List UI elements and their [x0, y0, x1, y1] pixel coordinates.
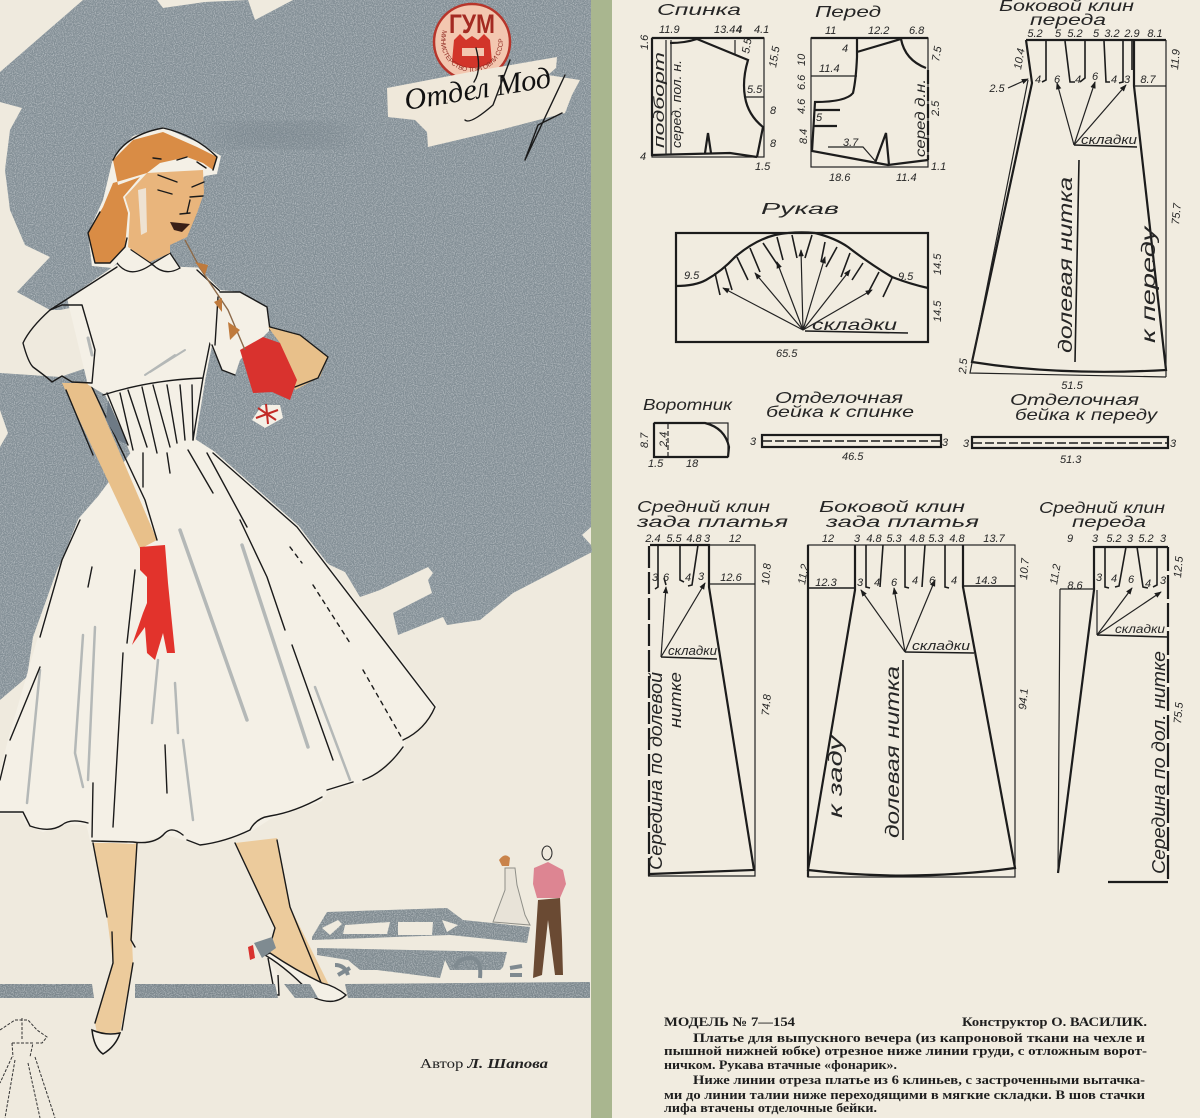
- description paragraphs: лифа втачены отделочные бейки.: [664, 1100, 877, 1115]
- pattern: front (Перед): 6.8: [909, 25, 925, 37]
- collar: [117, 247, 180, 272]
- pattern: back (Спинка): 5.5: [740, 37, 755, 55]
- pattern: back facing strip: 3: [750, 436, 757, 448]
- pattern: side gore of front (Боковой клин переда): 5.2: [1067, 28, 1083, 40]
- pattern: back (Спинка): 13.4: [714, 24, 735, 36]
- pattern: side gore of front (Боковой клин переда): к переду: [1139, 225, 1160, 343]
- heading: бейка к переду: [1015, 407, 1158, 424]
- pattern: front facing strip: [963, 392, 1177, 466]
- pattern: sleeve (Рукав): 14.5: [932, 300, 944, 322]
- pattern: centre gore of back: складки: [668, 644, 717, 658]
- designer credit: Конструктор О. ВАСИЛИК.: [962, 1014, 1147, 1029]
- heading: Средний клин: [637, 499, 770, 516]
- heading: зада платья: [824, 514, 980, 531]
- pattern: centre gore of front: 4: [1145, 578, 1151, 590]
- pattern: side gore of front (Боковой клин переда): 8.1: [1147, 28, 1163, 40]
- pattern: side gore of back: 6: [891, 577, 898, 589]
- pattern: front (Перед): 4: [842, 43, 848, 55]
- logo: GUM round badge: МИНИСТЕРСТВО ТОРГОВЛИ СССР: [441, 30, 503, 72]
- pattern: side gore of back: 4: [951, 575, 957, 587]
- pattern: side gore of front (Боковой клин переда): 4: [1111, 74, 1117, 86]
- pattern: side gore of front (Боковой клин переда): 8.7: [1140, 74, 1157, 86]
- pattern: centre gore of front: 9: [1067, 533, 1073, 545]
- pattern: back (Спинка): 4.1: [754, 24, 769, 36]
- pattern: side gore of front (Боковой клин переда): 4: [1075, 74, 1081, 86]
- heading: [766, 390, 914, 421]
- heading: Боковой клин: [819, 499, 965, 516]
- torn paper label with title: [387, 48, 580, 160]
- pattern: side gore of front (Боковой клин переда): 75.7: [1170, 202, 1184, 225]
- model description text: [664, 1014, 1147, 1115]
- pattern: side gore of back: 14.3: [975, 575, 998, 587]
- road band: [0, 982, 590, 998]
- logo: GUM round badge: [432, 2, 512, 76]
- pattern: front (Перед): 8.4: [798, 129, 810, 144]
- pattern: side gore of front (Боковой клин переда): 2.5: [988, 83, 1006, 95]
- pattern: side gore of front (Боковой клин переда): 51.5: [1061, 380, 1084, 392]
- pattern: side gore of back: [796, 499, 1032, 877]
- pattern: centre gore of front: 6: [1128, 574, 1135, 586]
- pattern: back (Спинка): 15.5: [767, 44, 783, 69]
- pattern: collar (Воротник): 18: [686, 458, 699, 470]
- pattern: back (Спинка): 5.5: [747, 84, 763, 96]
- description paragraphs: Платье для выпускного вечера (из капроновой ткани на чехле и: [693, 1030, 1146, 1045]
- author credit: Автор Л. Шапова: [420, 1057, 548, 1072]
- pattern: sleeve (Рукав): 14.5: [932, 253, 944, 275]
- pattern: side gore of front (Боковой клин переда): 3: [1124, 74, 1131, 86]
- red glove on left hand: [132, 545, 175, 660]
- pattern: side gore of back: 11.2: [796, 563, 812, 586]
- heading: Перед: [815, 4, 881, 21]
- pattern: back facing strip: 3: [942, 437, 949, 449]
- title: Отдел Мод: [402, 48, 565, 160]
- pattern: centre gore of back: 4: [685, 572, 691, 584]
- skirt: [0, 440, 435, 845]
- heading: [1010, 392, 1158, 424]
- pattern: centre gore of front: 8.6: [1067, 580, 1084, 592]
- pattern: front (Перед): 11: [825, 25, 836, 37]
- pattern: centre gore of front: 3: [1096, 572, 1103, 584]
- heading: Отделочная: [775, 390, 904, 407]
- pattern: centre gore of front: 3: [1160, 533, 1167, 545]
- pattern: centre gore of back: Середина по долевой: [646, 672, 666, 870]
- right forearm: [268, 327, 328, 390]
- pattern: centre gore of back: 6: [663, 572, 670, 584]
- pattern: back (Спинка): подборт: [651, 52, 668, 148]
- pattern: side gore of front (Боковой клин переда): 4: [1035, 74, 1041, 86]
- pattern: back (Спинка): [639, 2, 783, 173]
- pattern: centre gore of back: 12: [729, 533, 741, 545]
- illustration: car: [312, 908, 530, 978]
- illustration: woman in white dress: [0, 127, 435, 1054]
- pattern: side gore of front (Боковой клин переда): 5.2: [1027, 28, 1043, 40]
- pattern: centre gore of front: 3: [1160, 575, 1167, 587]
- pattern: front (Перед): серед д.н.: [912, 79, 928, 157]
- pattern: centre gore of back: 10.8: [760, 562, 774, 585]
- pattern: side gore of back: 4.8: [949, 533, 966, 545]
- pattern: side gore of front (Боковой клин переда): переда: [1030, 12, 1106, 29]
- pattern: side gore of back: 6: [929, 575, 936, 587]
- pattern: centre gore of front: складки: [1115, 622, 1165, 636]
- pattern: centre gore of back: 12.6: [720, 572, 743, 584]
- heading: [819, 499, 980, 531]
- description paragraphs: Ниже линии отреза платье из 6 клиньев, с застроченными вытачка-: [693, 1072, 1145, 1087]
- heading: [635, 499, 789, 531]
- pattern: side gore of front (Боковой клин переда): 2.9: [1123, 28, 1140, 40]
- pattern: centre gore of back: нитке: [666, 672, 685, 728]
- pattern: front (Перед): 5: [816, 112, 823, 124]
- pattern: front (Перед): 11.4: [819, 63, 840, 75]
- pattern: side gore of back: 4: [912, 575, 918, 587]
- pattern: collar (Воротник): 2.4: [658, 432, 670, 448]
- pattern: centre gore of back: 3: [704, 533, 711, 545]
- pattern: side gore of back: 94.1: [1017, 688, 1031, 710]
- pattern: side gore of back: 3: [854, 533, 861, 545]
- pattern: front (Перед): 4.6: [796, 98, 808, 114]
- heading: Воротник: [643, 397, 734, 414]
- pattern: centre gore of front: Середина по дол. нитке: [1149, 651, 1169, 874]
- pattern: side gore of back: 13.7: [983, 533, 1006, 545]
- left arm: [62, 383, 157, 549]
- pattern: side gore of back: складки: [912, 638, 970, 653]
- pattern: front facing strip: 51.3: [1060, 454, 1082, 466]
- pattern: back (Спинка): 1.6: [639, 34, 651, 50]
- pattern: centre gore of front: 11.2: [1048, 563, 1064, 586]
- pattern: centre gore of back: [635, 499, 789, 876]
- green page divider: [591, 0, 613, 1118]
- pattern: centre gore of front: 4: [1111, 573, 1117, 585]
- heading: [1039, 500, 1165, 531]
- pattern: centre gore of back: 4.8: [686, 533, 703, 545]
- pattern: back (Спинка): 1.5: [755, 161, 771, 173]
- pattern: sleeve (Рукав): 9.5: [684, 270, 700, 282]
- pattern: side gore of front (Боковой клин переда): 10.4: [1012, 47, 1028, 71]
- pattern: side gore of back: долевая нитка: [883, 666, 904, 838]
- head and hair: [88, 127, 221, 268]
- pattern: front (Перед): 7.5: [930, 45, 945, 63]
- pattern: side gore of back: 4.8: [866, 533, 883, 545]
- pattern: back facing strip: [750, 390, 949, 463]
- pattern: front (Перед): [796, 4, 946, 184]
- pattern: back (Спинка): 8: [770, 138, 777, 150]
- pattern: front (Перед): 11.4: [896, 172, 917, 184]
- pattern: back (Спинка): 11.9: [659, 24, 680, 36]
- pattern: centre gore of back: 74.8: [760, 693, 774, 716]
- pattern: centre gore of back: 5.5: [666, 533, 683, 545]
- description paragraphs: ми до линии талии ниже переходящими в мягкие складки. В шов стачки: [664, 1087, 1146, 1102]
- legs: [92, 838, 346, 1054]
- description paragraphs: [664, 1030, 1147, 1115]
- pattern: centre gore of front: 75.5: [1172, 701, 1186, 724]
- panel: left magazine page background: [0, 0, 592, 1118]
- puff sleeves: [23, 290, 270, 383]
- bodice and waist: [50, 267, 247, 527]
- heading: бейка к спинке: [766, 404, 914, 421]
- pattern: sleeve (Рукав): складки: [812, 317, 897, 334]
- pattern: centre gore of back: 2.4: [644, 533, 661, 545]
- illustration: couple beside the car: [493, 846, 566, 978]
- pattern: sleeve (Рукав): 65.5: [776, 348, 798, 360]
- pattern: front (Перед): 10: [796, 53, 808, 66]
- small technical dress sketch: [0, 1018, 55, 1118]
- logo: GUM round badge: ГУМ: [449, 9, 495, 39]
- pattern: side gore of front (Боковой клин переда): 11.9: [1169, 49, 1183, 70]
- pattern: centre gore of back: 3: [652, 572, 659, 584]
- pattern: sleeve (Рукав): [676, 201, 944, 360]
- pattern: side gore of back: 5.3: [886, 533, 903, 545]
- pattern: centre gore of front: 3: [1092, 533, 1099, 545]
- pattern: front (Перед): 1.1: [931, 161, 946, 173]
- pattern: side gore of front (Боковой клин переда): 5: [1093, 28, 1100, 40]
- pattern: sleeve (Рукав): 9.5: [898, 271, 914, 283]
- pattern: side gore of front (Боковой клин переда): 6: [1054, 74, 1061, 86]
- pattern: centre gore of front: 12.5: [1172, 555, 1186, 578]
- pattern: back (Спинка): 4: [640, 151, 646, 163]
- pattern: centre gore of front: 5.2: [1106, 533, 1122, 545]
- pattern: side gore of front (Боковой клин переда): 5: [1055, 28, 1062, 40]
- heading: Отделочная: [1010, 392, 1140, 409]
- pattern: side gore of front (Боковой клин переда): складки: [1081, 132, 1137, 147]
- shoes: [92, 1030, 120, 1054]
- pattern: collar (Воротник): 1.5: [648, 458, 664, 470]
- pattern: collar (Воротник): [639, 397, 734, 470]
- pattern: side gore of back: 10.7: [1018, 557, 1032, 580]
- heading: зада платья: [635, 514, 789, 531]
- pattern: back (Спинка): 8: [770, 105, 777, 117]
- pattern: side gore of back: 12: [822, 533, 834, 545]
- pattern: side gore of front (Боковой клин переда): 3.2: [1104, 28, 1120, 40]
- heading: Спинка: [657, 2, 741, 19]
- pattern: centre gore of front: [1039, 500, 1186, 882]
- pattern: front facing strip: 3: [1170, 438, 1177, 450]
- pattern: front (Перед): 3.7: [843, 137, 859, 149]
- title: Отдел Мод: Отдел Мод: [402, 61, 553, 117]
- pattern: side gore of back: 4.8: [909, 533, 926, 545]
- pattern: front (Перед): 12.2: [868, 25, 889, 37]
- pattern: side gore of back: 3: [857, 577, 864, 589]
- red glove held in hand: [185, 240, 297, 428]
- pattern: side gore of back: к заду: [826, 734, 847, 818]
- pattern: side gore of back: 4: [874, 577, 880, 589]
- grey brushed background shape: [0, 0, 592, 700]
- pattern: side gore of front (Боковой клин переда): 6: [1092, 71, 1099, 83]
- pattern: front facing strip: 3: [963, 438, 970, 450]
- pattern: front (Перед): 18.6: [829, 172, 851, 184]
- pattern: collar (Воротник): 8.7: [639, 432, 651, 448]
- heading: Средний клин: [1039, 500, 1165, 517]
- model number: МОДЕЛЬ № 7—154: [664, 1014, 796, 1029]
- panel: right pattern page background: [612, 0, 1200, 1118]
- pattern: back (Спинка): серед. пол. н.: [669, 60, 684, 148]
- pattern: centre gore of back: 3: [698, 571, 705, 583]
- pattern: side gore of front (Боковой клин переда): долевая нитка: [1056, 177, 1077, 353]
- description paragraphs: пышной нижней юбке) отрезное ниже линии груди, с отложным ворот-: [664, 1043, 1147, 1058]
- pattern: side gore of front (Боковой клин переда): 2.5: [957, 357, 970, 375]
- pattern: front (Перед): 2.5: [930, 100, 942, 117]
- pattern: side gore of back: 12.3: [815, 577, 838, 589]
- pattern: side gore of back: 5.3: [928, 533, 945, 545]
- description paragraphs: ничком. Рукава втачные «фонарик».: [664, 1057, 897, 1072]
- pattern: back facing strip: 46.5: [842, 451, 864, 463]
- pattern: front (Перед): 6.6: [796, 74, 808, 90]
- heading: Рукав: [761, 201, 839, 218]
- pattern: centre gore of front: 3: [1127, 533, 1134, 545]
- heading: переда: [1072, 514, 1146, 531]
- pattern: centre gore of front: 5.2: [1138, 533, 1154, 545]
- pattern: back (Спинка): 4: [735, 24, 742, 36]
- pattern: side gore of front (Боковой клин переда): [957, 0, 1184, 392]
